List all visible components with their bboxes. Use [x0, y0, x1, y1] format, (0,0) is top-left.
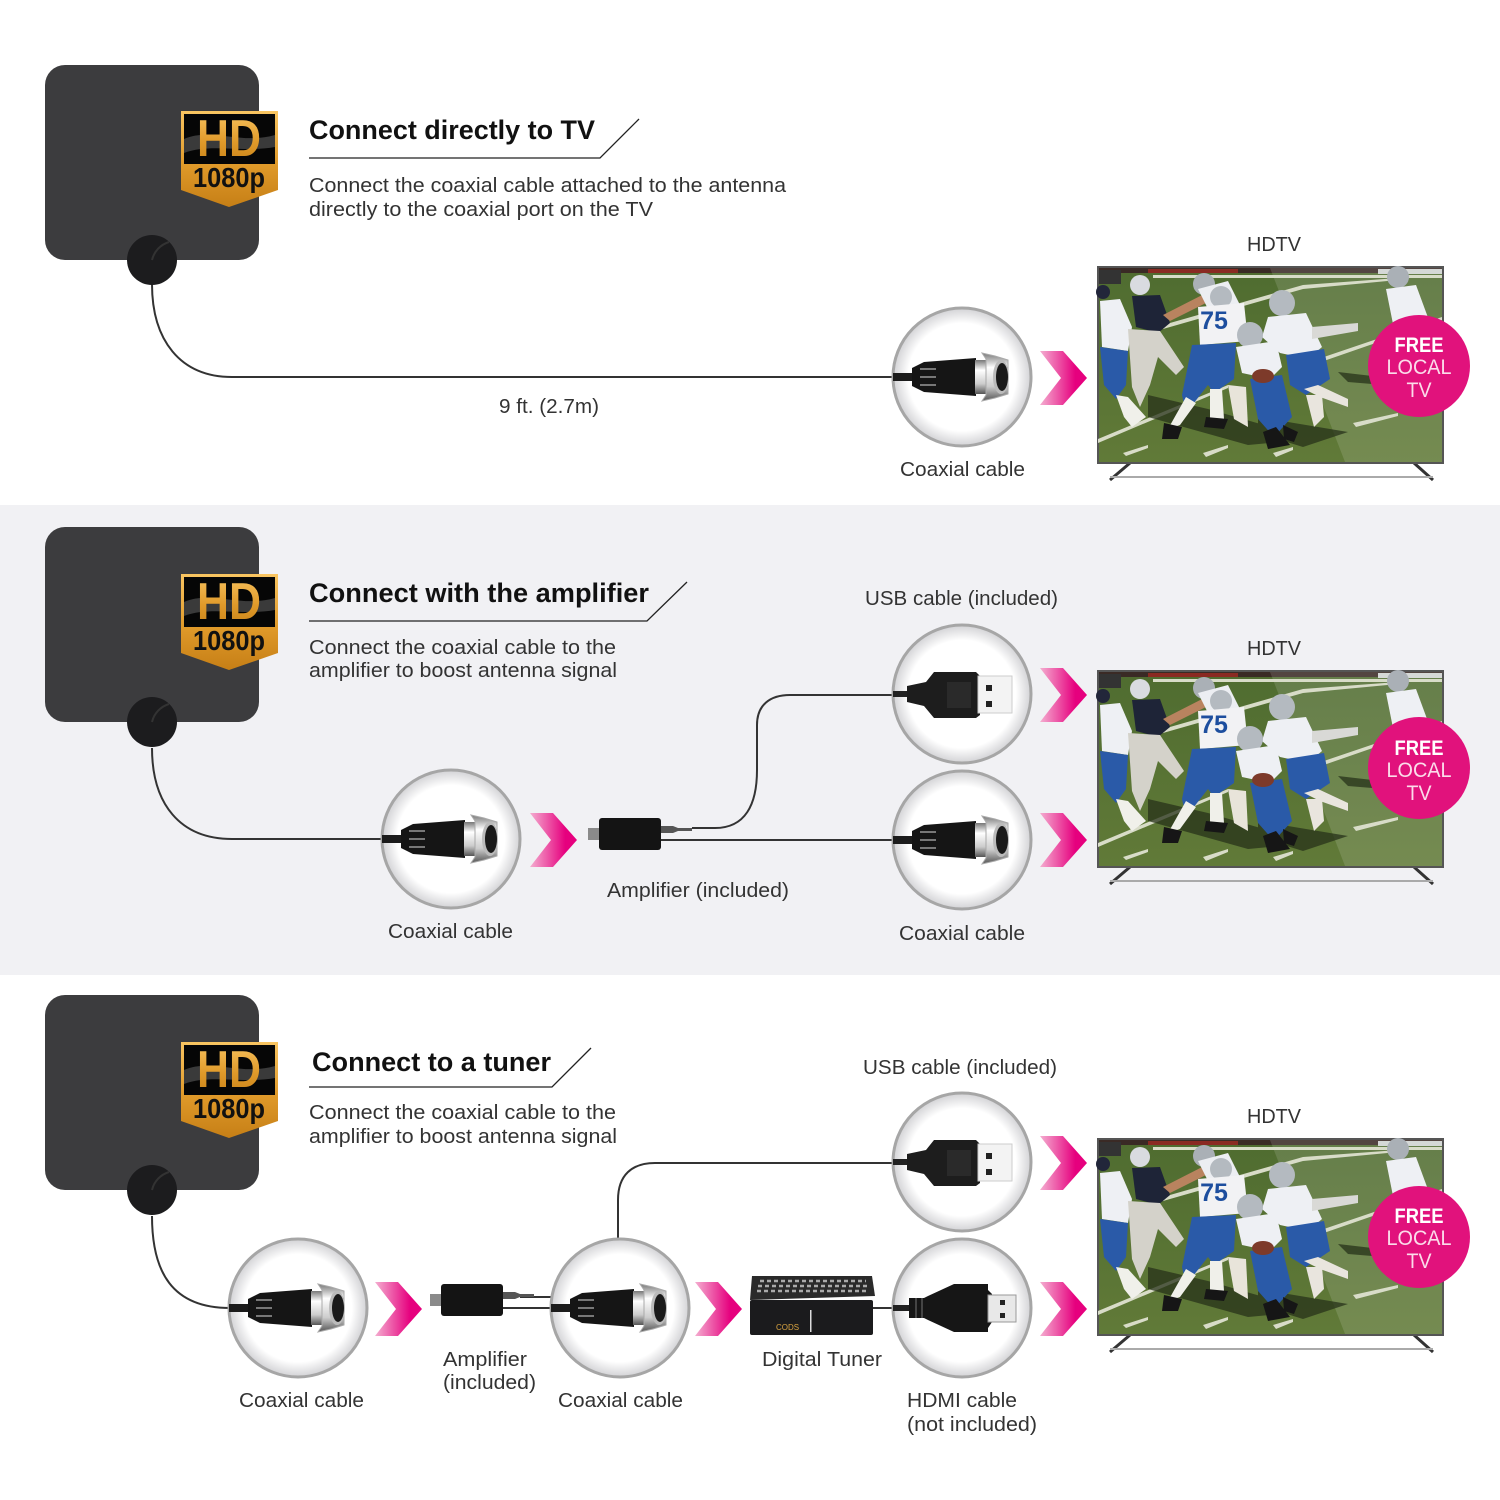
- callout: free local TV: FREE: [1394, 334, 1444, 357]
- callout: free local TV: [1368, 717, 1470, 819]
- description text: [309, 175, 787, 221]
- icon: flat antenna: [45, 527, 259, 747]
- icon: HD 1080p badge: 1080p: [193, 1093, 265, 1124]
- callout: free local TV: LOCAL: [1386, 356, 1452, 379]
- arrow: USB to TV: [1040, 668, 1087, 722]
- callout: free local TV: LOCAL: [1386, 1227, 1452, 1250]
- callout: free local TV: TV: [1406, 1250, 1432, 1273]
- callout: USB connector: [893, 1093, 1031, 1231]
- arrow: [375, 1282, 422, 1336]
- callout: free local TV: [1368, 315, 1470, 417]
- arrow: [1040, 351, 1087, 405]
- panel: connect to a tuner: [45, 995, 1470, 1436]
- cables: antenna, amplifier, tuner, USB and HDMI: [152, 1163, 892, 1308]
- heading: connect directly to TV: Connect directly to TV: [309, 115, 595, 145]
- description text: Connect the coaxial cable to the: [309, 637, 616, 659]
- arrow: HDMI to TV: [1040, 1282, 1087, 1336]
- label: HDMI cable: (not included): [907, 1414, 1037, 1436]
- description text: Connect the coaxial cable attached to the antenna: [309, 175, 787, 197]
- callout: free local TV: FREE: [1394, 1205, 1444, 1228]
- label: coaxial cable: Coaxial cable: [900, 459, 1025, 481]
- arrow: [695, 1282, 742, 1336]
- description text: [309, 1102, 617, 1148]
- icon: HD 1080p badge: [181, 110, 278, 207]
- icon: HD 1080p badge: [181, 1041, 278, 1138]
- icon: digital tuner and remote: CODS: [776, 1323, 799, 1332]
- callout: free local TV: TV: [1406, 379, 1432, 402]
- label: HDTV: HDTV: [1247, 234, 1302, 256]
- TV with football game: 75: [1200, 711, 1228, 739]
- icon: flat antenna: [45, 995, 259, 1215]
- icon: HD 1080p badge: 1080p: [193, 162, 265, 193]
- label: HDMI cable: HDMI cable: [907, 1390, 1017, 1412]
- TV with football game: [1096, 1138, 1443, 1352]
- TV with football game: 75: [1200, 307, 1228, 335]
- arrow: [530, 813, 577, 867]
- section 2 background panel: [0, 505, 1500, 975]
- arrow: USB to TV: [1040, 1136, 1087, 1190]
- description text: [309, 637, 617, 682]
- label: USB cable: USB cable (included): [865, 588, 1058, 610]
- icon: HD 1080p badge: HD: [197, 1041, 261, 1099]
- panel: connect with the amplifier: [45, 527, 1470, 945]
- label: amplifier: Amplifier (included): [607, 880, 789, 902]
- heading: connect with the amplifier: [309, 578, 687, 621]
- TV with football game: 75: [1200, 1179, 1228, 1207]
- icon: HD 1080p badge: 1080p: [193, 625, 265, 656]
- heading: connect to a tuner: [309, 1047, 591, 1087]
- label: coaxial cable: Coaxial cable: [899, 923, 1025, 945]
- callout: free local TV: FREE: [1394, 737, 1444, 760]
- description text: amplifier to boost antenna signal: [309, 1126, 617, 1148]
- label: USB cable: USB cable (included): [863, 1057, 1057, 1079]
- icon: HD 1080p badge: HD: [197, 110, 261, 168]
- cable length label: 9 ft. (2.7m): [499, 396, 599, 418]
- label: HDTV: HDTV: [1247, 1106, 1302, 1128]
- cables: antenna, amplifier, USB and coaxial: [152, 695, 892, 840]
- icon: amplifier: [588, 818, 692, 850]
- heading: connect directly to TV: [309, 115, 639, 158]
- label: HDTV: HDTV: [1247, 638, 1302, 660]
- label: coaxial cable: Coaxial cable: [388, 921, 513, 943]
- icon: digital tuner and remote: [750, 1276, 875, 1335]
- callout: HDMI connector: [893, 1239, 1031, 1377]
- TV with football game: [1096, 670, 1443, 884]
- label: coaxial cable: Coaxial cable: [239, 1390, 364, 1412]
- TV with football game: [1096, 266, 1443, 480]
- label: amplifier: Amplifier: [443, 1349, 527, 1371]
- description text: amplifier to boost antenna signal: [309, 660, 617, 682]
- heading: connect with the amplifier: Connect with the amplifier: [309, 578, 649, 608]
- callout: free local TV: [1368, 1186, 1470, 1288]
- callout: USB connector: [893, 625, 1031, 763]
- label: digital tuner: Digital Tuner: [762, 1349, 882, 1371]
- callout: coaxial connector: [382, 770, 520, 908]
- label: amplifier: (included): [443, 1372, 536, 1394]
- arrow: coaxial to TV: [1040, 813, 1087, 867]
- icon: HD 1080p badge: HD: [197, 573, 261, 631]
- callout: coaxial connector: [893, 308, 1031, 446]
- callout: free local TV: LOCAL: [1386, 759, 1452, 782]
- label: coaxial cable: Coaxial cable: [558, 1390, 683, 1412]
- callout: free local TV: TV: [1406, 782, 1432, 805]
- label: amplifier: [443, 1349, 536, 1394]
- description text: Connect the coaxial cable to the: [309, 1102, 616, 1124]
- callout: coaxial connector: [229, 1239, 367, 1377]
- coaxial cable from antenna to TV: [152, 284, 892, 377]
- heading: connect to a tuner: Connect to a tuner: [312, 1047, 551, 1077]
- callout: coaxial connector: [551, 1239, 689, 1377]
- callout: coaxial connector: [893, 771, 1031, 909]
- description text: directly to the coaxial port on the TV: [309, 199, 654, 221]
- label: HDMI cable: [907, 1390, 1037, 1436]
- icon: amplifier: [430, 1284, 534, 1316]
- icon: flat antenna: [45, 65, 259, 285]
- icon: HD 1080p badge: [181, 573, 278, 670]
- panel: connect directly to TV: [45, 65, 1470, 481]
